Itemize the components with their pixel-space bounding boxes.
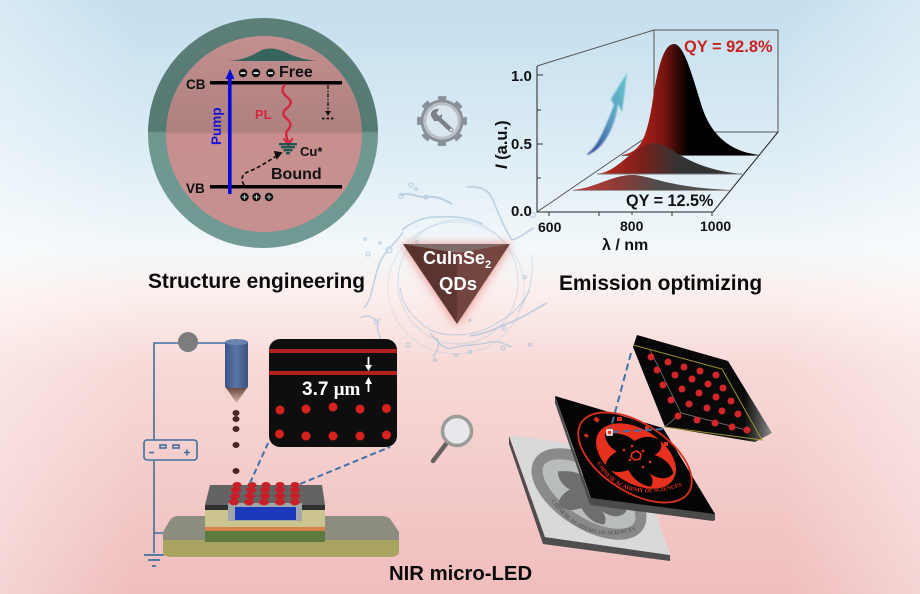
chart: QY 3D emission spectra: 0.5 [511, 136, 532, 153]
micrograph inset [269, 339, 397, 447]
panel: display layers [509, 335, 772, 561]
meter circle [178, 332, 198, 352]
print nozzle [225, 339, 248, 403]
spectrum: 92.8 percent [622, 44, 760, 155]
panel: inkjet micro-LED [144, 332, 399, 566]
red QD pixel array [229, 482, 300, 505]
heading: structure engineering: Structure engineering [148, 270, 365, 293]
dashed hole transfer arrow [242, 152, 281, 185]
Cu level trap [279, 143, 297, 154]
quantum dot shell [148, 18, 378, 248]
CB label: CB [186, 77, 206, 92]
white substrate layer [509, 435, 670, 561]
zoom dashed lines [250, 441, 390, 484]
Cu* label: Cu* [300, 144, 323, 159]
heading: NIR micro-LED: NIR micro-LED [389, 563, 532, 585]
triangle: CuInSe2 QDs: 2 [485, 259, 491, 271]
triangle: CuInSe2 QDs: CuInSe [423, 248, 485, 268]
battery [144, 440, 197, 460]
icon: gear with wrench [420, 98, 464, 144]
chart: QY 3D emission spectra: 800 [620, 218, 644, 234]
3D frame back wall [537, 30, 778, 132]
quantum dot core [166, 36, 362, 232]
pump arrow [226, 69, 234, 194]
y tick labels: 1.0 [511, 68, 532, 85]
ink droplets [232, 410, 240, 474]
triangle: CuInSe2 QDs: QDs [439, 273, 477, 294]
chart: QY 3D emission spectra: 0.0 [511, 203, 532, 220]
holes [240, 193, 273, 201]
y axis ticks [537, 75, 712, 216]
free carrier distribution curve [228, 49, 317, 61]
Pump label: Pump [209, 107, 224, 145]
white substrate layer: CHINESE ACADEMY OF SCIENCES [552, 500, 636, 535]
increase arrow [587, 73, 627, 155]
QY low label: QY = 12.5% [626, 192, 713, 210]
black red pattern layer [555, 396, 715, 521]
QY high label: QY = 92.8% [684, 38, 773, 56]
conduction band line [210, 81, 342, 84]
zoom dashed lines [610, 353, 665, 432]
water splash ring [360, 183, 547, 362]
3D pixel array layer [633, 335, 772, 442]
x axis title: λ / nm [602, 237, 648, 254]
dashed nonradiative arrow [322, 85, 334, 118]
LED device [205, 485, 325, 542]
black red pattern layer: CHINESE ACADEMY OF SCIENCES [598, 462, 682, 492]
valence band line [210, 185, 342, 188]
x tick labels: 600 [538, 219, 562, 235]
electrons [239, 69, 275, 77]
circuit wires [144, 343, 240, 566]
base substrate [163, 516, 399, 557]
chart: QY 3D emission spectra: 1000 [700, 218, 731, 234]
spectrum: middle [597, 143, 742, 174]
chart: QY 3D emission spectra [493, 30, 778, 254]
y axis title: I (a.u.) [493, 120, 511, 169]
PL wavy arrow [283, 84, 293, 147]
heading: emission optimizing: Emission optimizing [559, 272, 762, 295]
selected region marker [607, 430, 612, 435]
Free label: Free [279, 64, 313, 81]
spectrum: 12.5 percent [573, 175, 730, 190]
panel: band structure quantum dot [148, 18, 378, 248]
icon: magnifying glass [433, 416, 472, 461]
PL label: PL [255, 107, 272, 122]
VB label: VB [186, 181, 205, 196]
Bound label: Bound [271, 166, 322, 183]
triangle: CuInSe2 QDs [402, 244, 511, 325]
micrograph inset: 3.7 μm [302, 379, 360, 400]
